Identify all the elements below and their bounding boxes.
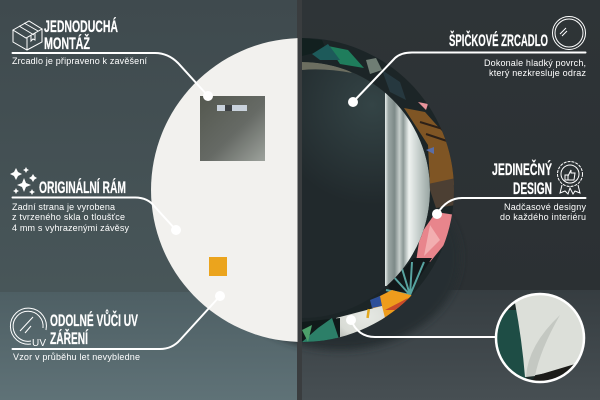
heading	[50, 310, 138, 348]
mirror front: glass and frame	[300, 36, 456, 344]
patterned frame	[300, 36, 456, 344]
callout: UV resistance	[10, 291, 225, 362]
heading: ZÁŘENÍ	[50, 329, 89, 348]
heading: JEDNODUCHÁ	[44, 17, 118, 36]
inset: frame edge close-up	[496, 294, 590, 385]
heading: ORIGINÁLNÍ RÁM	[39, 178, 126, 197]
callout: detail inset	[346, 294, 590, 385]
icon: UV mirror	[10, 308, 46, 349]
mounting plate	[200, 96, 265, 161]
heading	[492, 160, 552, 198]
heading: ODOLNÉ VŮČI UV	[50, 310, 138, 330]
leader line	[12, 198, 181, 235]
description: který nezkresluje odraz	[489, 68, 586, 78]
description	[12, 202, 130, 233]
description	[484, 58, 586, 78]
description: Dokonale hladký povrch,	[484, 58, 586, 68]
leader line	[12, 291, 225, 349]
leader line	[12, 53, 213, 101]
centre divider	[297, 0, 302, 400]
leader line	[432, 198, 586, 219]
leader line	[348, 52, 586, 107]
callout: original frame	[10, 167, 181, 235]
description: z tvrzeného skla o tloušťce	[12, 212, 125, 222]
description: Zadní strana je vyrobena	[12, 202, 115, 212]
background: right wall and floor	[220, 0, 600, 400]
heading: JEDINEČNÝ	[492, 160, 552, 179]
icon: UV mirror: UV	[32, 338, 46, 349]
icon: box	[13, 21, 42, 50]
heading: DESIGN	[513, 179, 552, 198]
icon: sparkles	[10, 167, 37, 195]
mirror glass with reflections	[302, 62, 430, 286]
icon: rosette badge	[558, 162, 582, 194]
callout: simple assembly	[12, 17, 213, 101]
description: do každého interiéru	[500, 212, 586, 222]
background: left wall and floor	[0, 0, 300, 400]
description: Nadčasové designy	[504, 202, 586, 212]
mirror back: white half disc	[151, 38, 298, 342]
yellow spacer	[209, 257, 227, 276]
callout: top mirror	[348, 16, 586, 107]
description: 4 mm s vyhrazenými závěsy	[12, 223, 130, 233]
icon: round mirror	[552, 16, 586, 50]
heading	[44, 17, 118, 53]
callout: unique design	[432, 160, 586, 222]
description: Vzor v průběhu let nevybledne	[13, 352, 140, 362]
description	[500, 202, 586, 222]
leader line	[346, 315, 497, 337]
description: Zrcadlo je připraveno k zavěšení	[12, 56, 147, 66]
heading: MONTÁŽ	[44, 34, 90, 53]
